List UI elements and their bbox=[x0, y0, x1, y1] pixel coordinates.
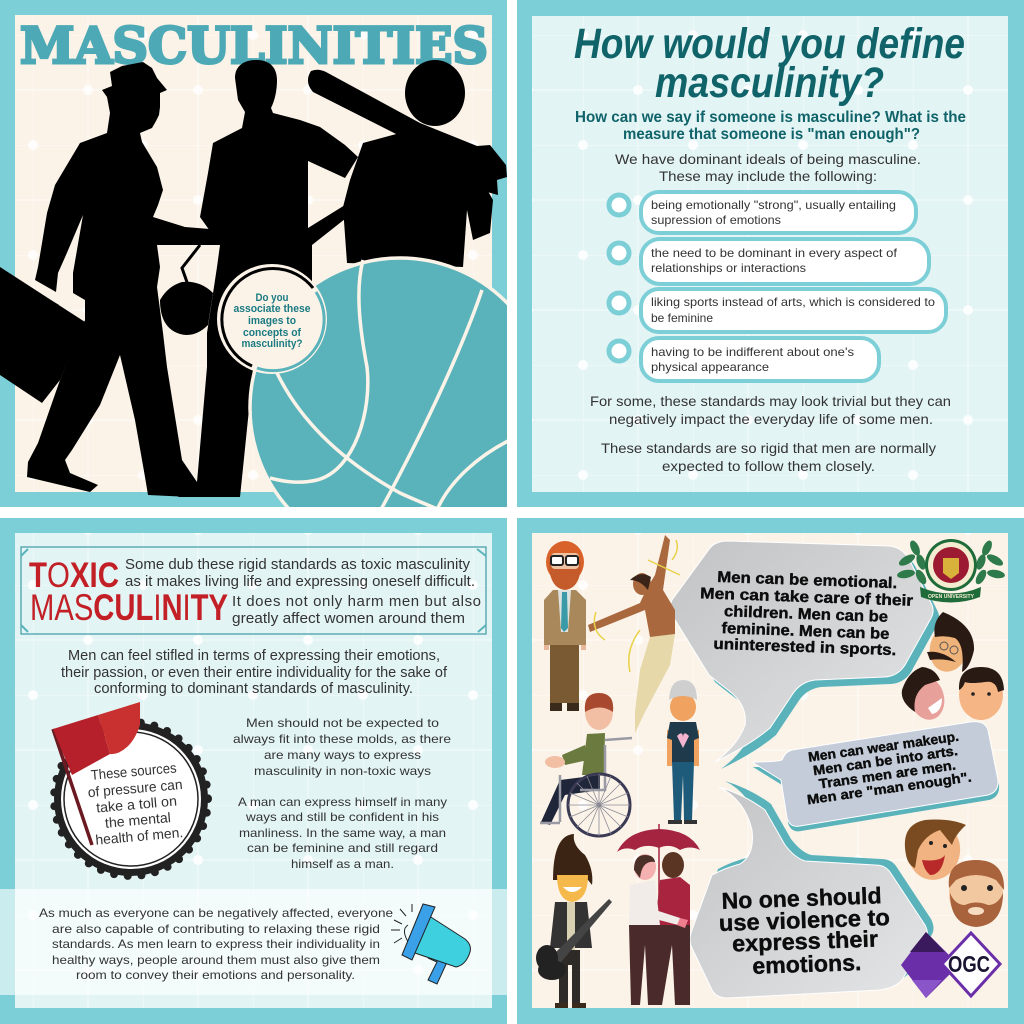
text: bubble one: Men can be emotional. bbox=[717, 569, 897, 592]
text: not expected to fit bbox=[233, 716, 451, 778]
figure: man with red beard and glasses bbox=[544, 541, 586, 711]
callout: do you associate bbox=[217, 264, 327, 374]
text: sources of pressure bbox=[86, 759, 187, 848]
logo: OGC bbox=[901, 932, 1000, 998]
band: everyone can contribute: standards. As men learn to express their individuality in bbox=[52, 937, 380, 951]
text: a man can express: ways and still be confident in his bbox=[245, 810, 439, 824]
band: everyone can contribute: healthy ways, people around them must also give them bbox=[52, 953, 380, 967]
title: toxic masculinity: MASCULINITY bbox=[30, 587, 228, 628]
text: rigid standards: expected to follow them closely. bbox=[662, 458, 875, 474]
callout: do you associate: masculinity? bbox=[242, 338, 303, 350]
silhouette: man with baseball bat bbox=[308, 60, 507, 267]
badge: flag and pressure note bbox=[53, 702, 208, 876]
text: impact of standards: For some, these standards may look trivial but they can bbox=[590, 393, 951, 409]
text: some dub: It does not only harm men but also bbox=[232, 593, 481, 610]
silhouette: man with ball bbox=[160, 60, 358, 497]
callout: do you associate: associate these bbox=[234, 303, 310, 315]
text: not expected to fit: Men should not be expected to bbox=[246, 716, 439, 730]
figure: couple under umbrella bbox=[617, 824, 700, 1005]
subheading bbox=[575, 109, 966, 143]
text: a man can express: A man can express himself in many bbox=[238, 795, 447, 809]
callout: do you associate: images to bbox=[248, 315, 296, 327]
text: sources of pressure: the mental bbox=[104, 809, 171, 831]
list item 2 bbox=[609, 239, 929, 284]
list item 3: liking sports instead of arts, which is considered to bbox=[651, 295, 935, 309]
list item 4: physical appearance bbox=[651, 360, 769, 374]
speech bubble: men can wear makeup bbox=[752, 722, 999, 831]
text: impact of standards bbox=[590, 393, 951, 427]
panel: masculinities cover bbox=[0, 0, 507, 507]
text: dominant ideals bbox=[615, 151, 921, 184]
text: bubble two: Men are "man enough". bbox=[806, 769, 973, 807]
text: bubble three bbox=[718, 882, 892, 980]
band: everyone can contribute bbox=[0, 889, 507, 995]
text: bubble one: children. Men can be bbox=[724, 603, 889, 626]
subheading: measure that someone is "man enough"? bbox=[623, 126, 920, 143]
text: sources of pressure: of pressure can bbox=[87, 776, 183, 800]
callout: do you associate: Do you bbox=[256, 292, 288, 304]
text: bubble three: emotions. bbox=[752, 949, 862, 979]
panel: men can be bbox=[517, 518, 1024, 1024]
heading: how would you define: masculinity? bbox=[655, 59, 884, 107]
title: masculinities: MASCULINITIES bbox=[20, 16, 488, 75]
heading: how would you define: How would you define bbox=[574, 20, 965, 68]
list item 3 bbox=[609, 289, 946, 332]
icon: university seal bbox=[896, 539, 1006, 602]
text: not expected to fit: are many ways to express bbox=[264, 748, 421, 762]
text: a man can express: himself as a man. bbox=[291, 857, 394, 871]
figure: guitarist bbox=[536, 834, 612, 1008]
panel: toxic masculinity bbox=[0, 518, 507, 1024]
text: bubble two: Men can wear makeup. bbox=[807, 729, 960, 765]
list item 1: being emotionally "strong", usually entailing bbox=[651, 198, 896, 212]
text: a man can express bbox=[238, 795, 447, 871]
icon: basketball bbox=[248, 256, 507, 507]
icon: bearded face bbox=[949, 860, 1004, 927]
text: impact of standards: negatively impact the everyday life of some men. bbox=[609, 411, 933, 427]
text: dominant ideals: We have dominant ideals of being masculine. bbox=[615, 151, 921, 167]
list item 1: supression of emotions bbox=[651, 213, 781, 227]
text: bubble three: use violence to bbox=[718, 904, 890, 936]
text: bubble two: Trans men are men. bbox=[818, 757, 957, 792]
text: bubble one: uninterested in sports. bbox=[713, 636, 897, 659]
text: bubble two: Men can be into arts. bbox=[812, 743, 959, 778]
band: everyone can contribute: room to convey their emotions and personality. bbox=[76, 968, 355, 982]
figure: man with trans pride shirt bbox=[667, 680, 699, 824]
text: not expected to fit: masculinity in non-toxic ways bbox=[254, 764, 431, 778]
text: bubble one: feminine. Men can be bbox=[721, 620, 890, 643]
text: rigid standards: These standards are so rigid that men are normally bbox=[601, 440, 936, 456]
icon: university seal: OPEN UNIVERSITY bbox=[928, 594, 975, 600]
text: men can feel stifled: their passion, or even their entire individuality for the sake of bbox=[61, 665, 448, 681]
text: bubble two bbox=[800, 728, 973, 807]
text: rigid standards bbox=[601, 440, 936, 474]
text: bubble three: express their bbox=[732, 925, 878, 957]
silhouette: businessman with briefcase bbox=[0, 62, 222, 497]
list item 4 bbox=[609, 338, 879, 381]
figure: man in wheelchair bbox=[540, 693, 632, 836]
figure: dancer with ribbon bbox=[588, 535, 680, 733]
logo: OGC: OGC bbox=[948, 951, 990, 977]
text: a man can express: manliness. In the same way, a man bbox=[239, 826, 446, 840]
icon: laughing brown hair face bbox=[903, 817, 966, 885]
title: toxic masculinity bbox=[29, 556, 228, 628]
list item 2: relationships or interactions bbox=[651, 261, 806, 275]
subheading: How can we say if someone is masculine? What is the bbox=[575, 109, 966, 126]
speech bubble: men can be emotional bbox=[670, 541, 939, 769]
text: a man can express: can be feminine and still regard bbox=[247, 841, 438, 855]
callout: do you associate: concepts of bbox=[243, 327, 301, 339]
list item 1 bbox=[609, 192, 916, 233]
text: not expected to fit: always fit into these molds, as there bbox=[233, 732, 451, 746]
text: some dub: as it makes living life and expressing oneself difficult. bbox=[125, 573, 475, 590]
icon: laughing face bbox=[902, 667, 949, 724]
band: everyone can contribute: As much as everyone can be negatively affected, everyone bbox=[39, 906, 393, 920]
icon: smiling face bbox=[959, 667, 1004, 720]
icon: red flag bbox=[53, 702, 140, 845]
speech bubble: no one should use violence bbox=[690, 781, 934, 998]
panel: how would you define masculinity bbox=[517, 0, 1024, 507]
header box bbox=[21, 547, 486, 634]
text: men can feel stifled bbox=[61, 648, 448, 697]
text: bubble one bbox=[698, 568, 914, 660]
text: some dub: greatly affect women around them bbox=[232, 610, 465, 627]
icon: face with mustache bbox=[924, 612, 974, 676]
text: bubble one: Men can take care of their bbox=[700, 585, 913, 610]
band: everyone can contribute: are also capable of contributing to relaxing these rigid bbox=[52, 922, 380, 936]
title: toxic masculinity: TOXIC bbox=[29, 556, 119, 595]
text: sources of pressure: take a toll on bbox=[95, 793, 178, 816]
text: men can feel stifled: conforming to dominant standards of masculinity. bbox=[94, 681, 413, 697]
text: dominant ideals: These may include the following: bbox=[659, 168, 877, 184]
heading: how would you define bbox=[574, 20, 965, 107]
text: bubble three: No one should bbox=[721, 882, 882, 914]
text: sources of pressure: health of men. bbox=[95, 824, 184, 848]
text: men can feel stifled: Men can feel stifled in terms of expressing their emotions, bbox=[68, 648, 440, 664]
list item 4: having to be indifferent about one's bbox=[651, 345, 854, 359]
text: some dub: Some dub these rigid standards as toxic masculinity bbox=[125, 556, 470, 573]
text: sources of pressure: These sources bbox=[90, 759, 177, 783]
list item 3: be feminine bbox=[651, 311, 713, 325]
icon: megaphone bbox=[391, 904, 470, 984]
text: some dub bbox=[125, 556, 481, 627]
list item 2: the need to be dominant in every aspect of bbox=[651, 246, 898, 260]
